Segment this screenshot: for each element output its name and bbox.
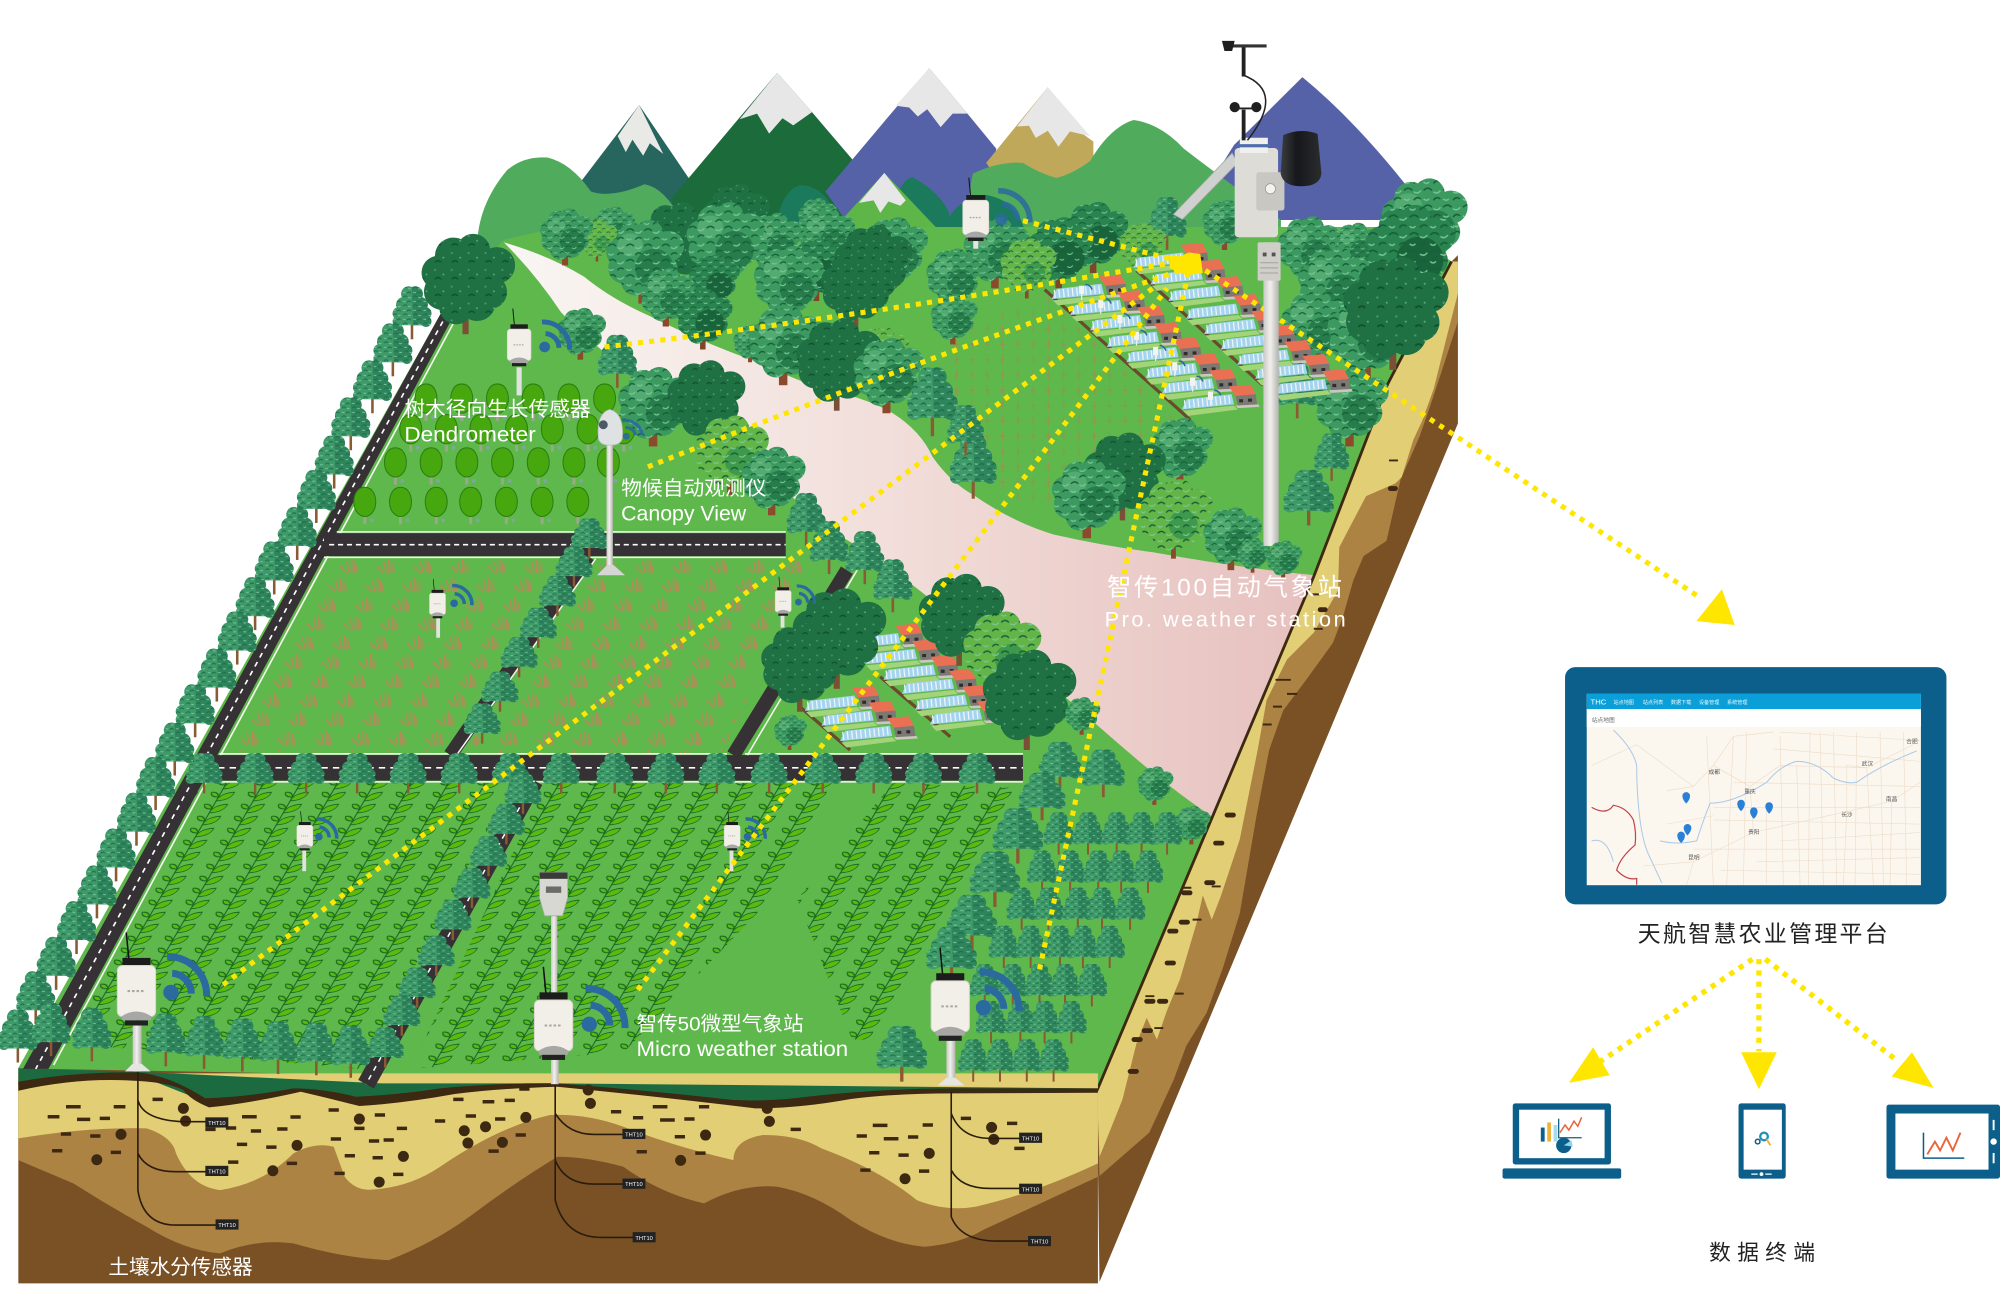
field: leafy rows east, far block [797,783,1023,1040]
label: micro weather station: Micro weather station [636,1038,848,1061]
THT10 soil moisture probes: THT10 [208,1121,226,1127]
platform title: 天航智慧农业管理平台 [1638,920,1888,946]
soil layer: upper sand [18,1073,1098,1208]
sensor: field west [429,579,472,638]
label: dendrometer: Dendrometer [404,423,536,446]
sensor: dendrometer station [507,309,570,395]
sensor cables [138,1072,1030,1241]
micro weather station mast [540,872,568,1005]
anemometer [1242,110,1245,140]
ground top surface [18,227,1452,1089]
sensor: front right station [931,948,1019,1085]
soil layer: middle [18,1073,1098,1260]
arrows to terminals [1569,959,1934,1089]
trees along the river and fields [422,234,1270,1082]
THT10 soil moisture probes: THT10 [1031,1240,1048,1246]
road: diagonal A [450,556,588,755]
sensor: front centre station [534,967,625,1084]
forest on the far bank [540,184,1249,436]
yellow hub marker [1170,253,1203,276]
label: pro weather station: 智传100自动气象站 [1107,575,1342,602]
map city names: 合肥 [1906,738,1918,746]
sensor: top of forest [963,178,1030,249]
label: micro weather station: 智传50微型气象站 [636,1014,804,1036]
arrowhead right [1892,1052,1934,1088]
river [504,242,1315,816]
laptop chart [1541,1128,1545,1142]
sensor: field east [775,577,815,628]
young tree orchard at front right [958,812,1182,1082]
road: lower crossing [204,755,1023,781]
THT10 soil moisture probes: THT10 [1022,1136,1039,1142]
field: seedling rows near the greenhouses [950,296,1180,510]
THT10 soil moisture probes: THT10 [218,1223,236,1229]
map city names: 成都 [1709,768,1720,776]
cliff pebbles [1130,489,1395,1071]
THT10 soil moisture probes [205,1117,1051,1246]
label: dendrometer: 树木径向生长传感器 [404,398,591,421]
platform tablet: THC [1591,698,1607,707]
road: upper crossing [324,533,786,556]
sensor: front left station [117,932,207,1071]
field: brown crop east [462,559,816,755]
road: diagonal C [733,570,847,755]
pole [1263,242,1279,546]
tree lines along the field roads [32,518,996,1078]
phone icon [1760,1133,1768,1140]
terminals caption: 数据终端 [1709,1240,1815,1265]
bracket [1258,242,1281,281]
label: pro weather station: Pro. weather station [1105,606,1346,631]
greenhouse field edges [1045,270,1263,420]
tiny sensors among greenhouses [1079,284,1092,300]
THT10 soil moisture probes: THT10 [1022,1187,1039,1193]
field: leafy rows east, main block [411,783,844,1069]
logger body [1235,148,1278,237]
roads [23,312,1023,1084]
label: canopy view [621,478,767,525]
map pins [1677,792,1773,843]
cliff side of the block [1097,255,1458,1282]
wind vane [1242,47,1245,77]
yellow data links across the field [223,221,1699,990]
soil layer: deep [18,1068,1098,1283]
label: soil moisture sensor: 土壤水分传感器 [108,1256,253,1279]
orchard trees with dendrometers [354,384,635,524]
THT10 soil moisture probes: THT10 [208,1169,226,1175]
label: micro weather station [636,1014,848,1061]
map city names [1688,738,1918,862]
rain gauge [1281,131,1321,186]
Pro weather station tower [1173,41,1321,546]
terminal: tablet [1886,1105,2000,1179]
map city names: 南昌 [1886,795,1898,803]
solar arm [1173,153,1237,219]
platform tablet: 系统管理 [1727,699,1747,706]
platform tablet: 站点地图 [1614,699,1634,706]
label: pro weather station [1105,575,1346,631]
terminal: laptop [1503,1103,1621,1179]
tablet screen [1587,694,1921,885]
arrowhead middle [1741,1052,1777,1089]
THT10 soil moisture probes: THT10 [625,1182,643,1188]
arrowhead left [1569,1047,1610,1083]
forest on the right edge [1277,178,1468,526]
platform tablet [1565,667,1946,904]
label: dendrometer [404,398,591,446]
platform tablet: 数据下载 [1671,699,1691,706]
platform tablet: 站点地图 [1592,716,1615,724]
cable [1244,75,1266,140]
dark topsoil band [18,1072,1098,1108]
platform tablet: 设备管理 [1699,699,1719,706]
field: brown crop west [219,559,566,753]
tree in front of the tower foot [1266,541,1302,579]
sensor: leafy field west [297,811,337,871]
road: left boundary [23,312,455,1069]
soil pebbles: dashes [48,1089,1025,1174]
road: diagonal B [366,781,534,1084]
map city names: 贵阳 [1748,828,1760,836]
soil pebbles: round [97,1090,994,1182]
canopy view camera [597,409,643,575]
THT10 soil moisture probes: THT10 [635,1236,653,1242]
map city names: 昆明 [1688,855,1700,862]
tree line along the left road [0,286,431,1062]
map city names: 重庆 [1744,787,1756,795]
THT10 soil moisture probes: THT10 [625,1132,643,1138]
arrow to platform [1696,589,1735,625]
sensor: leafy field east [724,811,765,871]
map lines [1592,730,1920,885]
screen header bar [1587,694,1921,709]
terminal: phone [1739,1103,1786,1179]
turf sliver [18,1068,1098,1103]
soil cross-section [18,1068,1098,1283]
tablet chart [1923,1133,1964,1158]
label: canopy view: Canopy View [621,502,747,525]
field: leafy rows west [66,783,513,1069]
map city names: 长沙 [1841,810,1853,818]
mountains and hills [477,68,1408,263]
greenhouse village north [1045,243,1353,420]
map city names: 武汉 [1862,759,1873,767]
platform tablet: 站点列表 [1643,699,1663,706]
label: canopy view: 物候自动观测仪 [621,478,767,500]
greenhouse village south [800,624,1008,750]
